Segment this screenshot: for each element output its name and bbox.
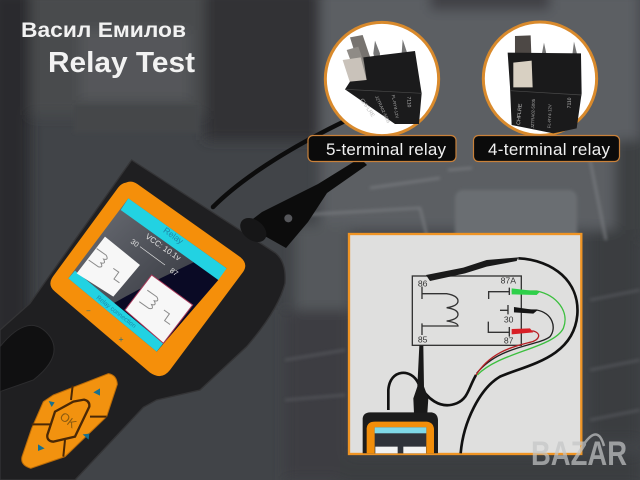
heading: Relay Test: Relay Test [48,47,195,79]
voltage reading: VCC: 10.1v [144,232,182,263]
terminal 87: 87 [168,266,180,278]
hand grip recess [0,325,54,392]
relay schematic: 85 [418,334,428,344]
relay body: 4-terminal: 7110 [567,97,573,108]
long black probe cable [461,258,577,453]
dark screen area [113,262,218,352]
relay card 2 [125,275,193,343]
black clip [514,307,537,314]
wiring diagram panel [349,234,581,454]
probe socket [236,213,271,247]
terminal 30: 30 [129,237,141,249]
keypad [22,374,117,468]
red lead [475,331,539,377]
relay body: 5-terminal: CHFLRE [358,98,376,119]
tester device [0,160,292,480]
label: 4-terminal relay [474,136,620,162]
heading: author name: Васил Емилов [21,18,186,42]
screen [68,198,227,352]
relay body: 5-terminal [343,35,422,124]
thin cable from tester [213,121,345,207]
strain relief highlight [284,214,292,222]
relay schematic: 87 [504,336,514,346]
OK button: OK [57,409,79,431]
label: 5-terminal relay: 5-terminal relay [326,140,446,159]
label: 4-terminal relay: 4-terminal relay [488,140,610,159]
keypad dividers [32,386,107,457]
orange bezel [50,182,245,376]
relay body: 5-terminal: 7110 [405,97,412,108]
probe clip [426,257,518,281]
relay circle: 5-terminal [325,22,439,136]
relay schematic: 86 [418,278,428,288]
screen title: Relay [161,225,186,246]
device body [0,160,285,480]
green clip [512,288,540,295]
relay body: 4-terminal: FL-RY4-12V [547,104,552,128]
relay card 1 [77,237,140,297]
label: 5-terminal relay [308,136,456,162]
relay body: 4-terminal [508,35,582,133]
relay body: 5-terminal: JZTRA02-5005 [374,95,391,124]
relay body: 4-terminal: JZTRA02-5005 [530,98,536,128]
relay schematic: 87A [501,276,516,286]
screen footer band [68,271,163,352]
green lead [477,291,565,375]
relay schematic: 30 [504,315,514,325]
black lead [477,310,553,373]
probe at terminal 85 [413,346,428,413]
relay schematic [412,276,521,346]
relay body: 5-terminal: FL-RY4-12V [391,94,400,119]
relay circle: 4-terminal [483,22,597,135]
minus label: − [86,306,91,315]
connection arrow [140,247,165,265]
relay body: 4-terminal: CHFLRE [516,103,524,125]
plus label: + [118,334,124,344]
screen footer text: Relay connection [95,294,138,330]
mini tester [363,412,438,453]
arrow icons [38,388,100,451]
lead bundle into tester [388,373,476,410]
red clip [512,328,533,334]
screen header band [121,198,227,280]
thick cable and strain relief [245,158,367,248]
